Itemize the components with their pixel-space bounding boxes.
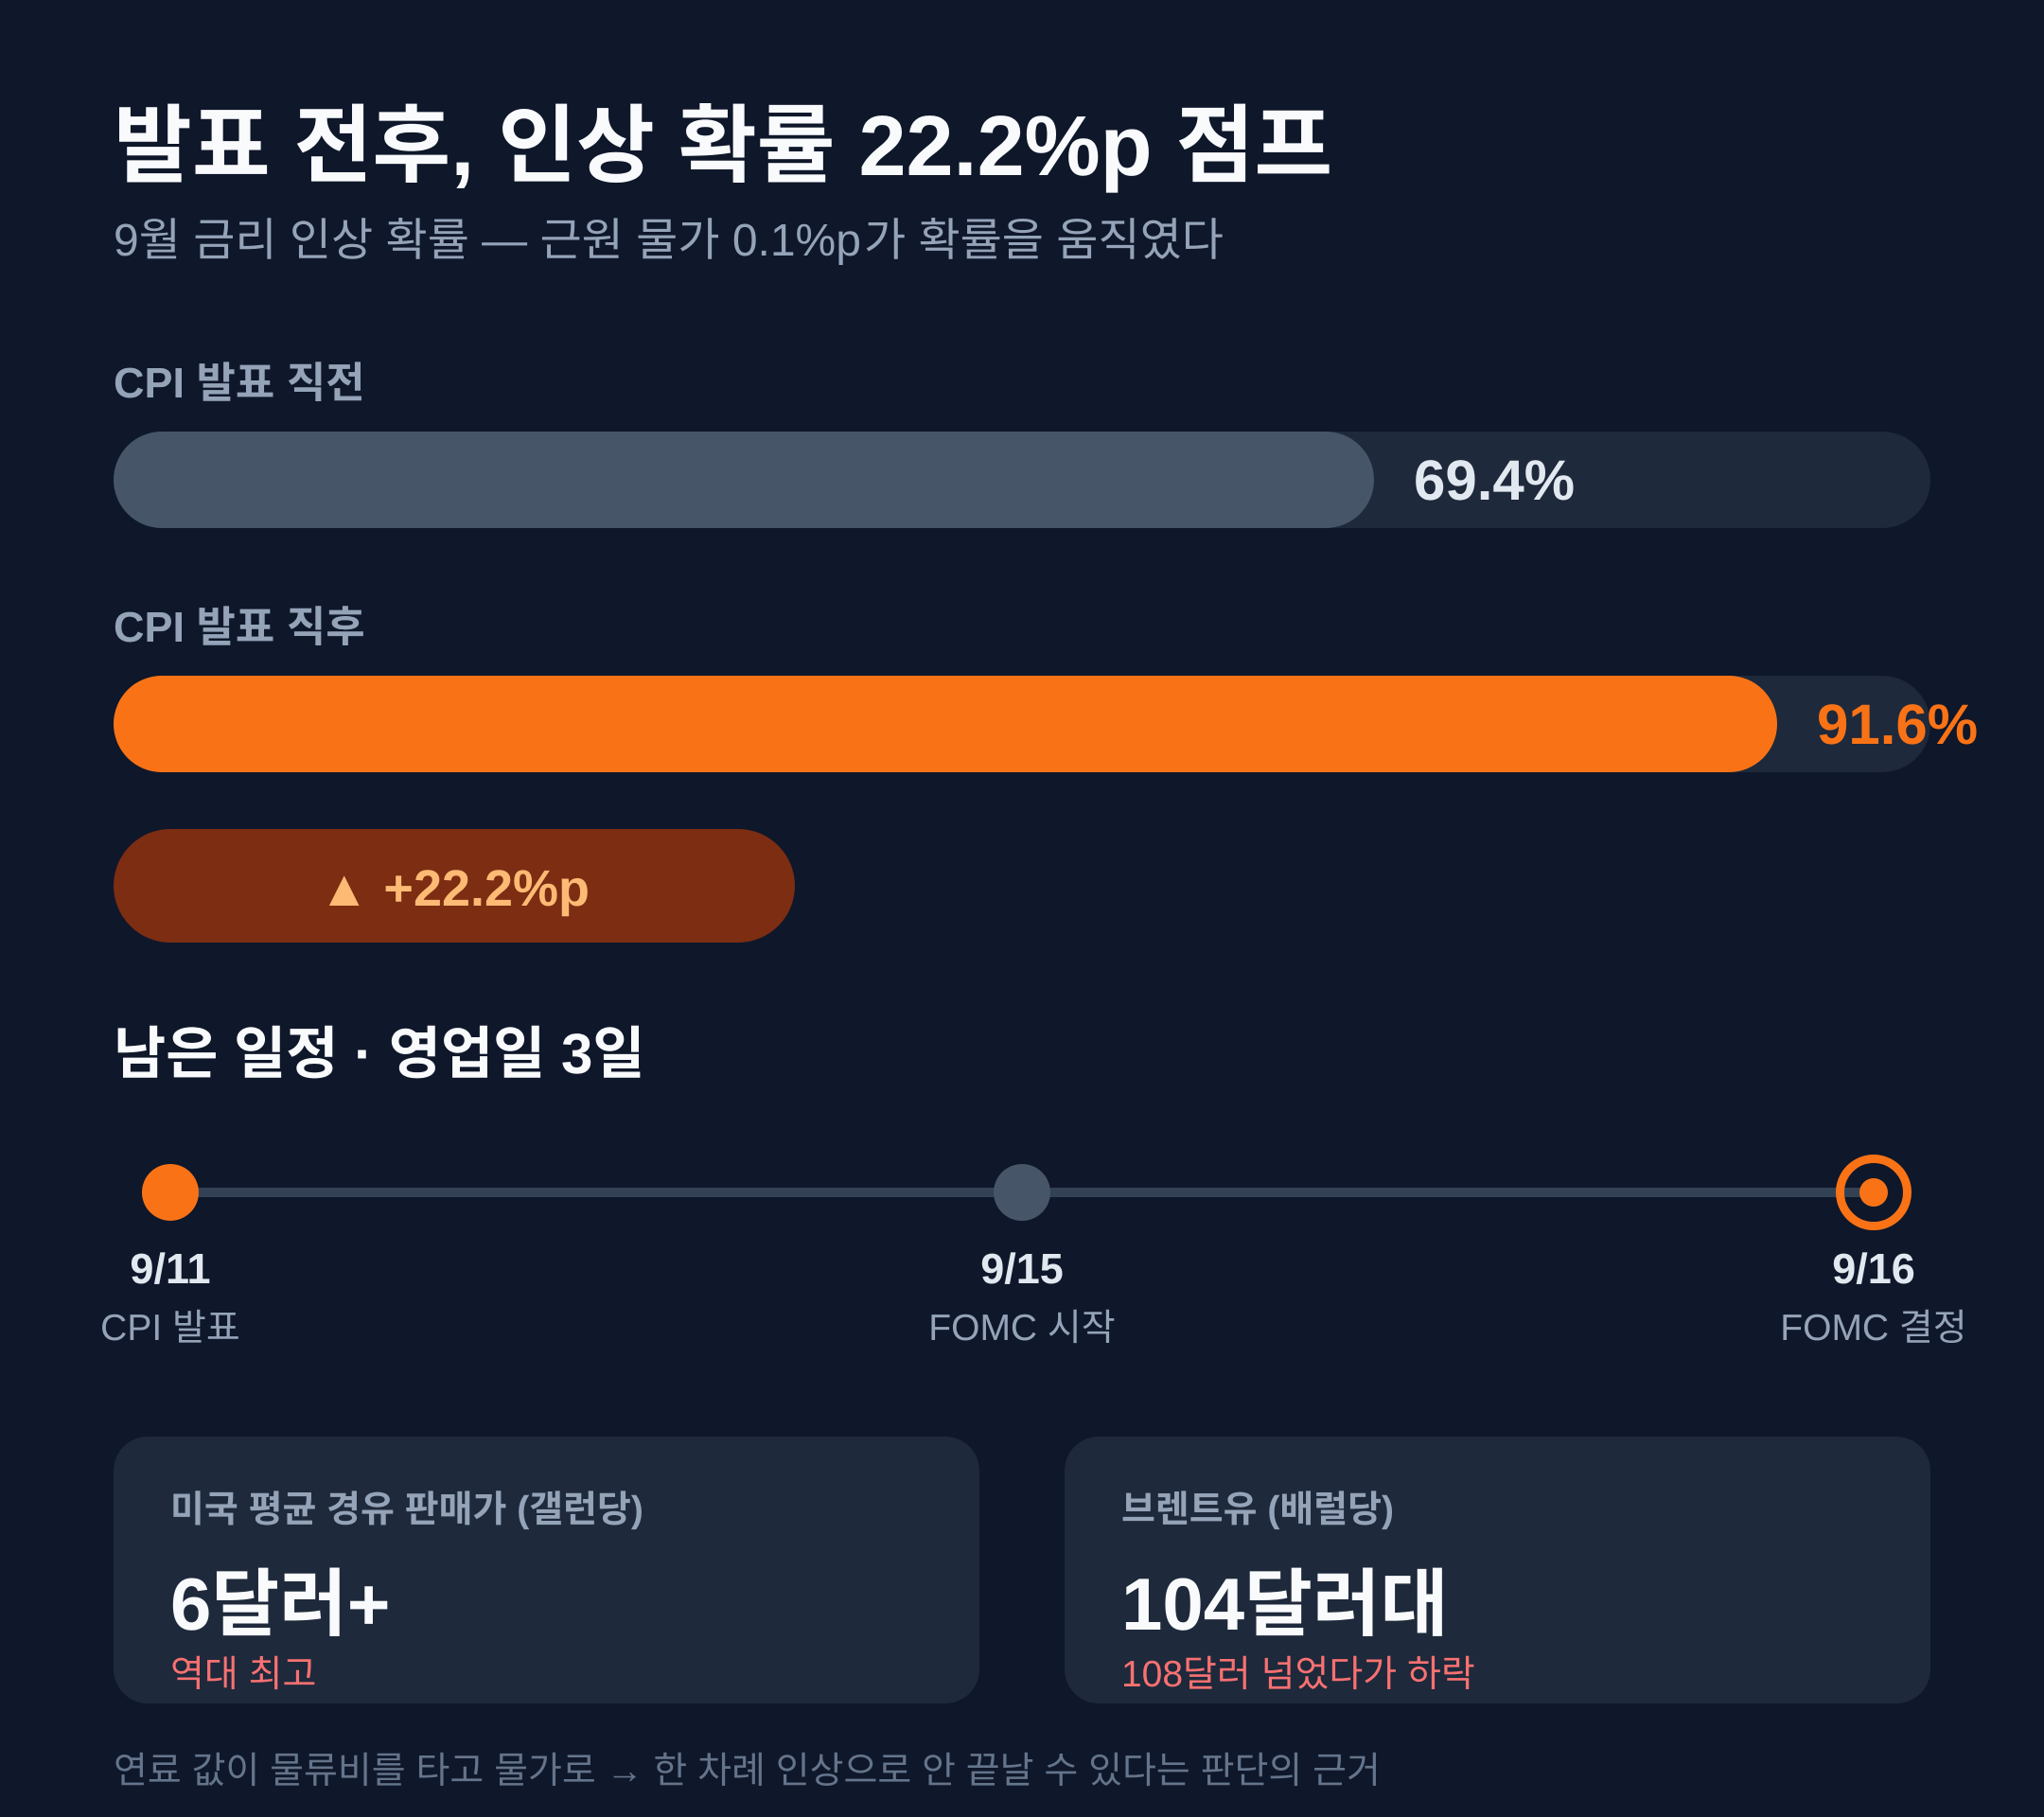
timeline: [100, 1155, 1967, 1349]
title: 발표 전후, 인상 확률 22.2%p 점프: [114, 99, 1332, 194]
label: after CPI: CPI 발표 직후: [114, 603, 365, 651]
date 9/15: 9/15: [980, 1244, 1064, 1293]
event: FOMC decision: FOMC 결정: [1780, 1308, 1967, 1349]
bar fill 69.4%: [114, 432, 1374, 528]
date 9/16: 9/16: [1832, 1244, 1915, 1293]
date 9/11: 9/11: [130, 1244, 211, 1293]
bar fill 91.6%: [114, 676, 1777, 772]
card value: 104달러대: [1121, 1562, 1448, 1646]
value 91.6%: 91.6%: [1817, 693, 1978, 756]
card note: 108달러 넘었다가 하락: [1121, 1654, 1475, 1695]
panel: US gasoline price: [114, 1437, 979, 1703]
callout text: ▲ +22.2%p: [319, 860, 590, 917]
section heading: schedule: 남은 일정 · 영업일 3일: [114, 1022, 645, 1085]
bar: after CPI: [114, 676, 1978, 772]
bar track: [114, 432, 1930, 528]
event: CPI release: CPI 발표: [100, 1308, 240, 1349]
callout: +22.2%p pill: [114, 829, 795, 943]
marker: 9/16 inner dot: [1859, 1178, 1888, 1207]
event: FOMC start: FOMC 시작: [928, 1308, 1116, 1349]
timeline line: [170, 1188, 1874, 1197]
marker: 9/11: [142, 1164, 199, 1221]
marker: 9/16 ring: [1836, 1155, 1912, 1230]
card label: 미국 평균 경유 판매가 (갤런당): [170, 1490, 643, 1530]
card note: 역대 최고: [170, 1654, 316, 1695]
bar track: [114, 676, 1930, 772]
value 69.4%: 69.4%: [1414, 449, 1575, 512]
footnote: 연료 값이 물류비를 타고 물가로 → 한 차례 인상으로 안 끝날 수 있다는 판단의 근거: [114, 1751, 1381, 1791]
card value: 6달러+: [170, 1562, 390, 1646]
subtitle: 9월 금리 인상 확률 — 근원 물가 0.1%p가 확률을 움직였다: [114, 216, 1224, 266]
card label: 브렌트유 (배럴당): [1121, 1490, 1394, 1530]
label: before CPI: CPI 발표 직전: [114, 359, 365, 407]
panel: Brent crude: [1065, 1437, 1930, 1703]
bar: before CPI: [114, 432, 1930, 528]
marker: 9/15: [994, 1164, 1050, 1221]
